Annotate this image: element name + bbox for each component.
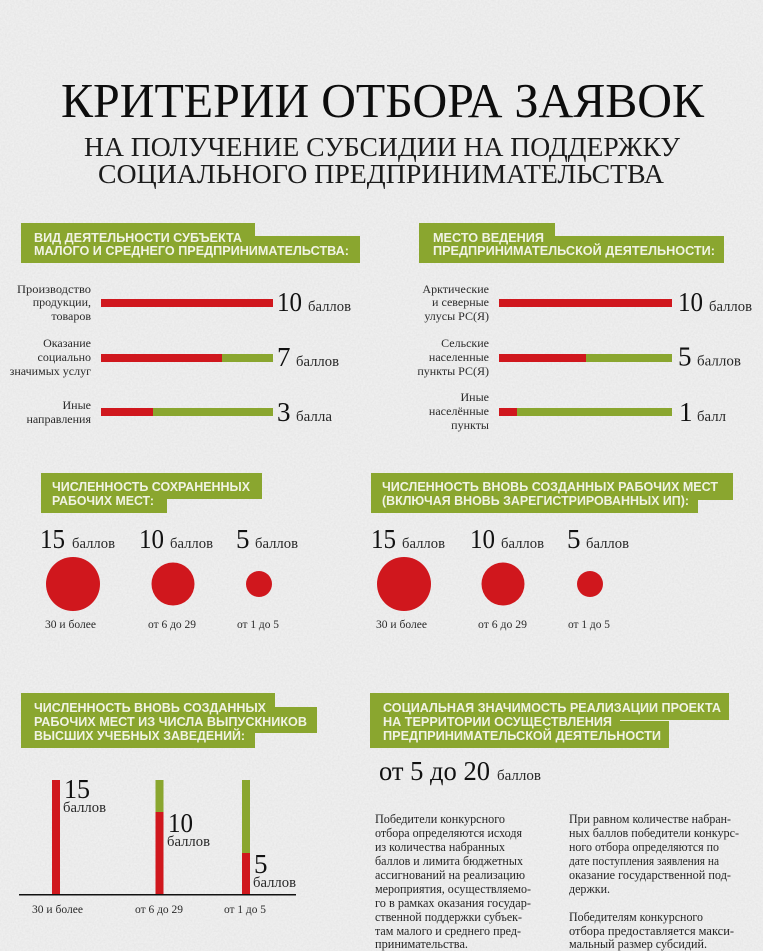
bar: 5 points: баллов (253, 875, 296, 891)
subtitle: НА ПОЛУЧЕНИЕ СУБСИДИИ НА ПОДДЕРЖКУ (84, 132, 681, 162)
text block: maximum subsidy: отбора предоставляется макси- (569, 924, 734, 938)
circle: 5 points (236, 524, 298, 631)
text block: winners: мероприятия, осуществляемо- (375, 882, 531, 896)
bar: 10 points (135, 780, 210, 916)
score range: баллов (497, 768, 541, 784)
row: other directions, 3 points: 3 (277, 397, 290, 427)
row: social services, 7 points: баллов (296, 354, 339, 370)
bar: 5 points: от 1 до 5 (224, 902, 266, 916)
heading: jobs for graduates (21, 693, 317, 748)
panel: social significance (370, 693, 739, 951)
circle: 15 points (40, 524, 115, 631)
bar: 15 points (32, 774, 106, 916)
row: rural settlements, 5 points: Сельские (441, 336, 489, 350)
row: other settlements, 1 point: балл (697, 409, 726, 425)
bar: 15 points: 30 и более (32, 902, 83, 916)
heading: jobs for graduates: ЧИСЛЕННОСТЬ ВНОВЬ СОЗДАННЫХ (34, 700, 266, 715)
circle: 10 points (139, 524, 213, 631)
circle: 15 points: 15 (371, 524, 396, 554)
panel: activity type (10, 223, 360, 427)
panel: retained jobs (40, 473, 298, 631)
circle: 5 points: 5 (567, 524, 580, 554)
text block: winners: ственной поддержки субъек- (375, 910, 522, 924)
row: other settlements, 1 point: Иные (461, 390, 489, 404)
row: other directions, 3 points: направления (26, 412, 91, 426)
row: production, 10 points: Производство (17, 282, 91, 296)
row: rural settlements, 5 points (417, 336, 741, 378)
circle: 15 points: баллов (402, 536, 445, 552)
circle: 10 points (470, 524, 544, 631)
heading: social significance: ПРЕДПРИНИМАТЕЛЬСКОЙ ДЕЯТЕЛЬНОСТИ (383, 728, 661, 743)
text block: equal score rule: держки. (569, 882, 610, 896)
row: social services, 7 points: 7 (277, 342, 290, 372)
text block: equal score rule (569, 812, 739, 896)
row: rural settlements, 5 points: 5 (678, 342, 692, 372)
row: arctic districts, 10 points: улусы РС(Я) (424, 309, 489, 323)
row: arctic districts, 10 points: баллов (709, 299, 752, 315)
circle: 5 points: от 1 до 5 (237, 617, 279, 631)
heading: newly created jobs (371, 473, 733, 513)
text block: winners: из количества набранных (375, 840, 505, 854)
bar: 5 points: 5 (254, 849, 268, 879)
heading: activity type (21, 223, 360, 263)
row: rural settlements, 5 points: баллов (697, 354, 741, 370)
row: production, 10 points: баллов (308, 299, 351, 315)
text block: maximum subsidy (569, 910, 734, 951)
heading: jobs for graduates: РАБОЧИХ МЕСТ ИЗ ЧИСЛА ВЫПУСКНИКОВ (34, 714, 307, 729)
text block: winners: отбора определяются исходя (375, 826, 522, 840)
circle: 5 points: баллов (255, 536, 298, 552)
circle: 15 points (371, 524, 445, 631)
circle: 10 points: от 6 до 29 (478, 617, 527, 631)
row: social services, 7 points: значимых услуг (10, 364, 91, 378)
row: other settlements, 1 point (429, 390, 726, 432)
row: arctic districts, 10 points: 10 (678, 287, 703, 317)
heading: social significance (370, 693, 729, 748)
heading: place of business: ПРЕДПРИНИМАТЕЛЬСКОЙ ДЕЯТЕЛЬНОСТИ: (433, 243, 715, 258)
circle: 10 points: баллов (501, 536, 544, 552)
text block: equal score rule: При равном количестве набран- (569, 812, 731, 826)
row: rural settlements, 5 points: населенные (429, 350, 489, 364)
circle: 10 points: баллов (170, 536, 213, 552)
panel: jobs for graduates (19, 693, 317, 916)
bar: 15 points: баллов (63, 800, 106, 816)
heading: retained jobs (41, 473, 262, 513)
row: other directions, 3 points (26, 397, 332, 427)
circle: 15 points: 30 и более (45, 617, 96, 631)
subtitle: СОЦИАЛЬНОГО ПРЕДПРИНИМАТЕЛЬСТВА (98, 159, 665, 189)
circle: 5 points: баллов (586, 536, 629, 552)
circle: 15 points: 15 (40, 524, 65, 554)
circle: 15 points: баллов (72, 536, 115, 552)
row: social services, 7 points: социально (38, 350, 91, 364)
circle: 5 points: от 1 до 5 (568, 617, 610, 631)
circle: 5 points: 5 (236, 524, 250, 554)
row: production, 10 points: товаров (51, 309, 91, 323)
panel: place of business (417, 223, 752, 432)
text block: winners (375, 812, 531, 951)
row: arctic districts, 10 points: и северные (432, 295, 489, 309)
bar: 5 points (224, 780, 296, 916)
text block: equal score rule: оказание государственной под- (569, 868, 731, 882)
panel: newly created jobs (371, 473, 733, 631)
heading: activity type: МАЛОГО И СРЕДНЕГО ПРЕДПРИНИМАТЕЛЬСТВА: (34, 243, 349, 258)
circle: 15 points: 30 и более (376, 617, 427, 631)
row: other directions, 3 points: балла (296, 409, 332, 425)
circle: 10 points: от 6 до 29 (148, 617, 196, 631)
score range (379, 756, 541, 786)
bar: 10 points: от 6 до 29 (135, 902, 183, 916)
row: production, 10 points: продукции, (33, 295, 91, 309)
heading: place of business: МЕСТО ВЕДЕНИЯ (433, 230, 544, 245)
text block: maximum subsidy: Победителям конкурсного (569, 910, 703, 924)
title: КРИТЕРИИ ОТБОРА ЗАЯВОК (61, 73, 704, 128)
circle: 5 points (567, 524, 629, 631)
heading: social significance: НА ТЕРРИТОРИИ ОСУЩЕСТВЛЕНИЯ (383, 714, 612, 729)
bar: 15 points: 15 (64, 774, 90, 804)
row: arctic districts, 10 points: Арктические (422, 282, 489, 296)
text block: equal score rule: ных баллов победители конкурс- (569, 826, 739, 840)
heading: activity type: ВИД ДЕЯТЕЛЬНОСТИ СУБЪЕКТА (34, 230, 243, 245)
heading: place of business (419, 223, 724, 263)
heading: social significance: СОЦИАЛЬНАЯ ЗНАЧИМОСТЬ РЕАЛИЗАЦИИ ПРОЕКТА (383, 700, 722, 715)
text block: equal score rule: дате поступления заявления на (569, 854, 720, 868)
row: production, 10 points (17, 282, 351, 323)
heading: retained jobs: РАБОЧИХ МЕСТ: (52, 493, 154, 508)
heading: retained jobs: ЧИСЛЕННОСТЬ СОХРАНЕННЫХ (52, 479, 250, 494)
row: social services, 7 points (10, 336, 339, 378)
row: other settlements, 1 point: пункты (451, 418, 489, 432)
heading: jobs for graduates: ВЫСШИХ УЧЕБНЫХ ЗАВЕДЕНИЙ: (34, 728, 245, 743)
row: social services, 7 points: Оказание (43, 336, 91, 350)
text block: maximum subsidy: мальный размер субсидий. (569, 937, 707, 951)
row: other settlements, 1 point: 1 (679, 397, 692, 427)
text block: winners: ассигнований на реализацию (375, 868, 525, 882)
heading: newly created jobs: ЧИСЛЕННОСТЬ ВНОВЬ СОЗДАННЫХ РАБОЧИХ МЕСТ (382, 479, 718, 494)
circle: 10 points: 10 (139, 524, 164, 554)
heading: newly created jobs: (ВКЛЮЧАЯ ВНОВЬ ЗАРЕГИСТРИРОВАННЫХ ИП): (382, 493, 689, 508)
score range: от 5 до 20 (379, 756, 490, 786)
bar: 10 points: баллов (167, 834, 210, 850)
text block: winners: го в рамках оказания государ- (375, 896, 531, 910)
row: arctic districts, 10 points (422, 282, 752, 323)
row: production, 10 points: 10 (277, 287, 302, 317)
text block: winners: принимательства. (375, 937, 468, 951)
text block: winners: там малого и среднего пред- (375, 924, 521, 938)
text block: winners: баллов и лимита бюджетных (375, 854, 523, 868)
row: other settlements, 1 point: населённые (429, 404, 489, 418)
circle: 10 points: 10 (470, 524, 495, 554)
subtitle (84, 132, 681, 189)
text block: winners: Победители конкурсного (375, 812, 505, 826)
bar: 10 points: 10 (168, 808, 193, 838)
row: rural settlements, 5 points: пункты РС(Я) (417, 364, 489, 378)
row: other directions, 3 points: Иные (63, 398, 91, 412)
text block: equal score rule: ного отбора определяются по (569, 840, 719, 854)
